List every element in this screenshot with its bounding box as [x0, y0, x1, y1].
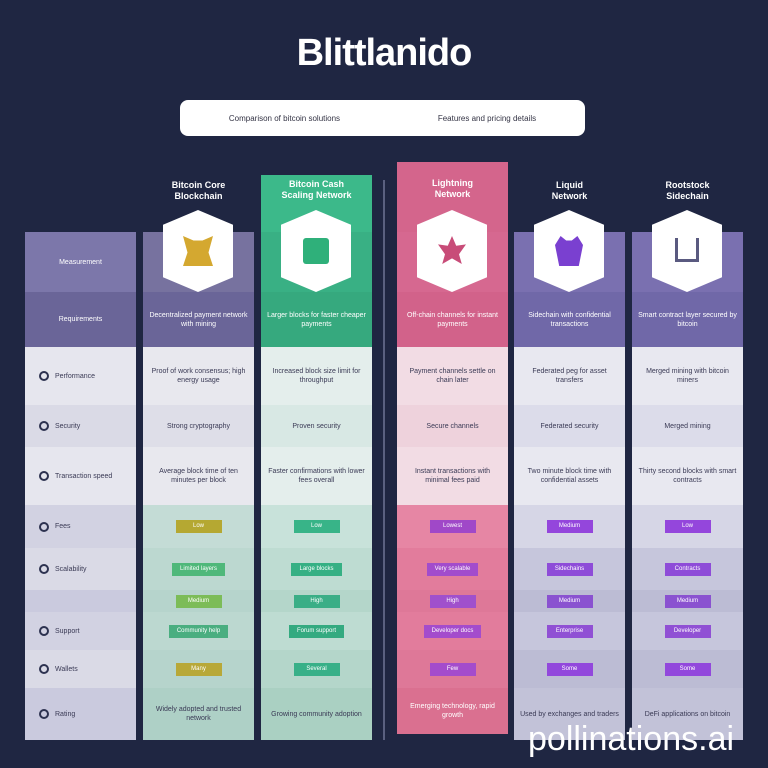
- column 5 purple: Developer: [674, 628, 701, 634]
- column 5 purple: Medium: [677, 598, 698, 604]
- column 4 purple: Federated security: [540, 422, 598, 430]
- column 3 pink: Emerging technology, rapid growth: [410, 703, 495, 719]
- column 5 purple: Merged mining: [664, 422, 711, 430]
- column 2 green: Large blocks: [299, 566, 334, 572]
- column 5 purple: [632, 232, 743, 740]
- column 3 pink: Few: [447, 666, 458, 672]
- label column: Support: [55, 628, 80, 634]
- column 1 gold: Strong cryptography: [167, 422, 230, 430]
- text: Liquid: [556, 180, 583, 190]
- column 3 pink: Developer docs: [432, 628, 473, 634]
- label column: [25, 232, 136, 740]
- column 3 pink: Off-chain channels for instant payments: [407, 312, 498, 328]
- title: Blittlanido: [297, 32, 471, 74]
- column 1 gold: Proof of work consensus; high energy usage: [152, 368, 245, 384]
- column 1 gold: Low: [193, 523, 204, 529]
- icon: green: [281, 210, 351, 292]
- column headings: [172, 180, 225, 201]
- label column: Scalability: [55, 566, 87, 572]
- column 2 green: Growing community adoption: [271, 710, 362, 718]
- subtitle pill: Comparison of bitcoin solutions: [229, 114, 340, 122]
- label column: Requirements: [59, 316, 102, 323]
- icon: gray: [652, 210, 722, 292]
- column 2 green: Proven security: [292, 422, 341, 430]
- column 4 purple: Some: [562, 666, 577, 672]
- column 3 pink: Very scalable: [435, 566, 470, 572]
- column 1 gold: [143, 232, 254, 740]
- label column: Measurement: [59, 258, 102, 266]
- text: Network: [552, 191, 587, 201]
- icon: purple: [534, 210, 604, 292]
- column 1 gold: Many: [191, 666, 206, 672]
- subtitle pill: Features and pricing details: [438, 114, 536, 122]
- text: Rootstock: [665, 180, 710, 190]
- column 3 pink: Instant transactions with minimal fees paid: [415, 468, 490, 484]
- column 2 green: High: [310, 598, 323, 604]
- column 4 purple: Federated peg for asset transfers: [532, 368, 607, 384]
- column 3 pink: Network: [435, 189, 470, 199]
- icon: pink: [417, 210, 487, 292]
- column 4 purple: Medium: [559, 598, 580, 604]
- column 3 pink: Lightning: [432, 178, 473, 188]
- column headings: Blockchain: [174, 191, 222, 201]
- column 1 gold: Widely adopted and trusted network: [156, 706, 241, 722]
- column 2 green: Several: [306, 666, 327, 672]
- column 2 green: Increased block size limit for throughput: [273, 368, 360, 384]
- column 4 purple: Medium: [559, 523, 580, 529]
- column 3 pink: High: [446, 598, 459, 604]
- column 3 pink: Lowest: [443, 523, 462, 529]
- column 4 purple: Sidechain with confidential transactions: [528, 312, 611, 328]
- text: Sidechain: [666, 191, 709, 201]
- label column: Transaction speed: [55, 472, 112, 480]
- column 1 gold: Decentralized payment network with mining: [149, 312, 248, 328]
- label column: Rating: [55, 710, 75, 718]
- label column: Performance: [55, 372, 95, 380]
- column 1 gold: Medium: [188, 598, 209, 604]
- column 5 purple: Thirty second blocks with smart contracts: [639, 468, 736, 484]
- label column: Fees: [55, 523, 71, 530]
- column 5 purple: Merged mining with bitcoin miners: [646, 368, 729, 384]
- column 2 green: Faster confirmations with lower fees overall: [268, 468, 365, 484]
- column 1 gold: Limited layers: [180, 566, 217, 572]
- column 2 green: Larger blocks for faster cheaper payments: [267, 312, 366, 328]
- column 4 purple: Two minute block time with confidential assets: [528, 468, 611, 484]
- column 5 purple: Contracts: [675, 566, 700, 572]
- icon: gold: [163, 210, 233, 292]
- column 3 pink: Secure channels: [426, 422, 479, 430]
- column headings: Bitcoin Core: [172, 180, 225, 190]
- column 2 green: Forum support: [297, 628, 336, 634]
- column 1 gold: Community help: [177, 628, 220, 634]
- column 4 purple: [514, 232, 625, 740]
- column 5 purple: Low: [682, 523, 693, 529]
- column 1 gold: Average block time of ten minutes per block: [159, 468, 238, 484]
- divider: [383, 180, 385, 740]
- column 4 purple: Sidechains: [555, 566, 584, 572]
- column 5 purple: Smart contract layer secured by bitcoin: [638, 312, 737, 328]
- column 4 purple: Used by exchanges and traders: [520, 710, 619, 718]
- column 3 pink: [397, 162, 508, 734]
- subtitle pill: [180, 100, 585, 136]
- label column: Wallets: [55, 666, 78, 672]
- column 2 green: [261, 175, 372, 740]
- column 4 purple: Enterprise: [556, 628, 583, 634]
- column 2 green: Low: [311, 523, 322, 529]
- watermark: pollinations.ai: [528, 720, 734, 758]
- column 3 pink: Payment channels settle on chain later: [410, 368, 496, 384]
- column 5 purple: Some: [680, 666, 695, 672]
- column 2 green: Scaling Network: [281, 190, 352, 200]
- label column: Security: [55, 422, 80, 430]
- column 5 purple: DeFi applications on bitcoin: [645, 710, 730, 718]
- column 2 green: Bitcoin Cash: [289, 179, 344, 189]
